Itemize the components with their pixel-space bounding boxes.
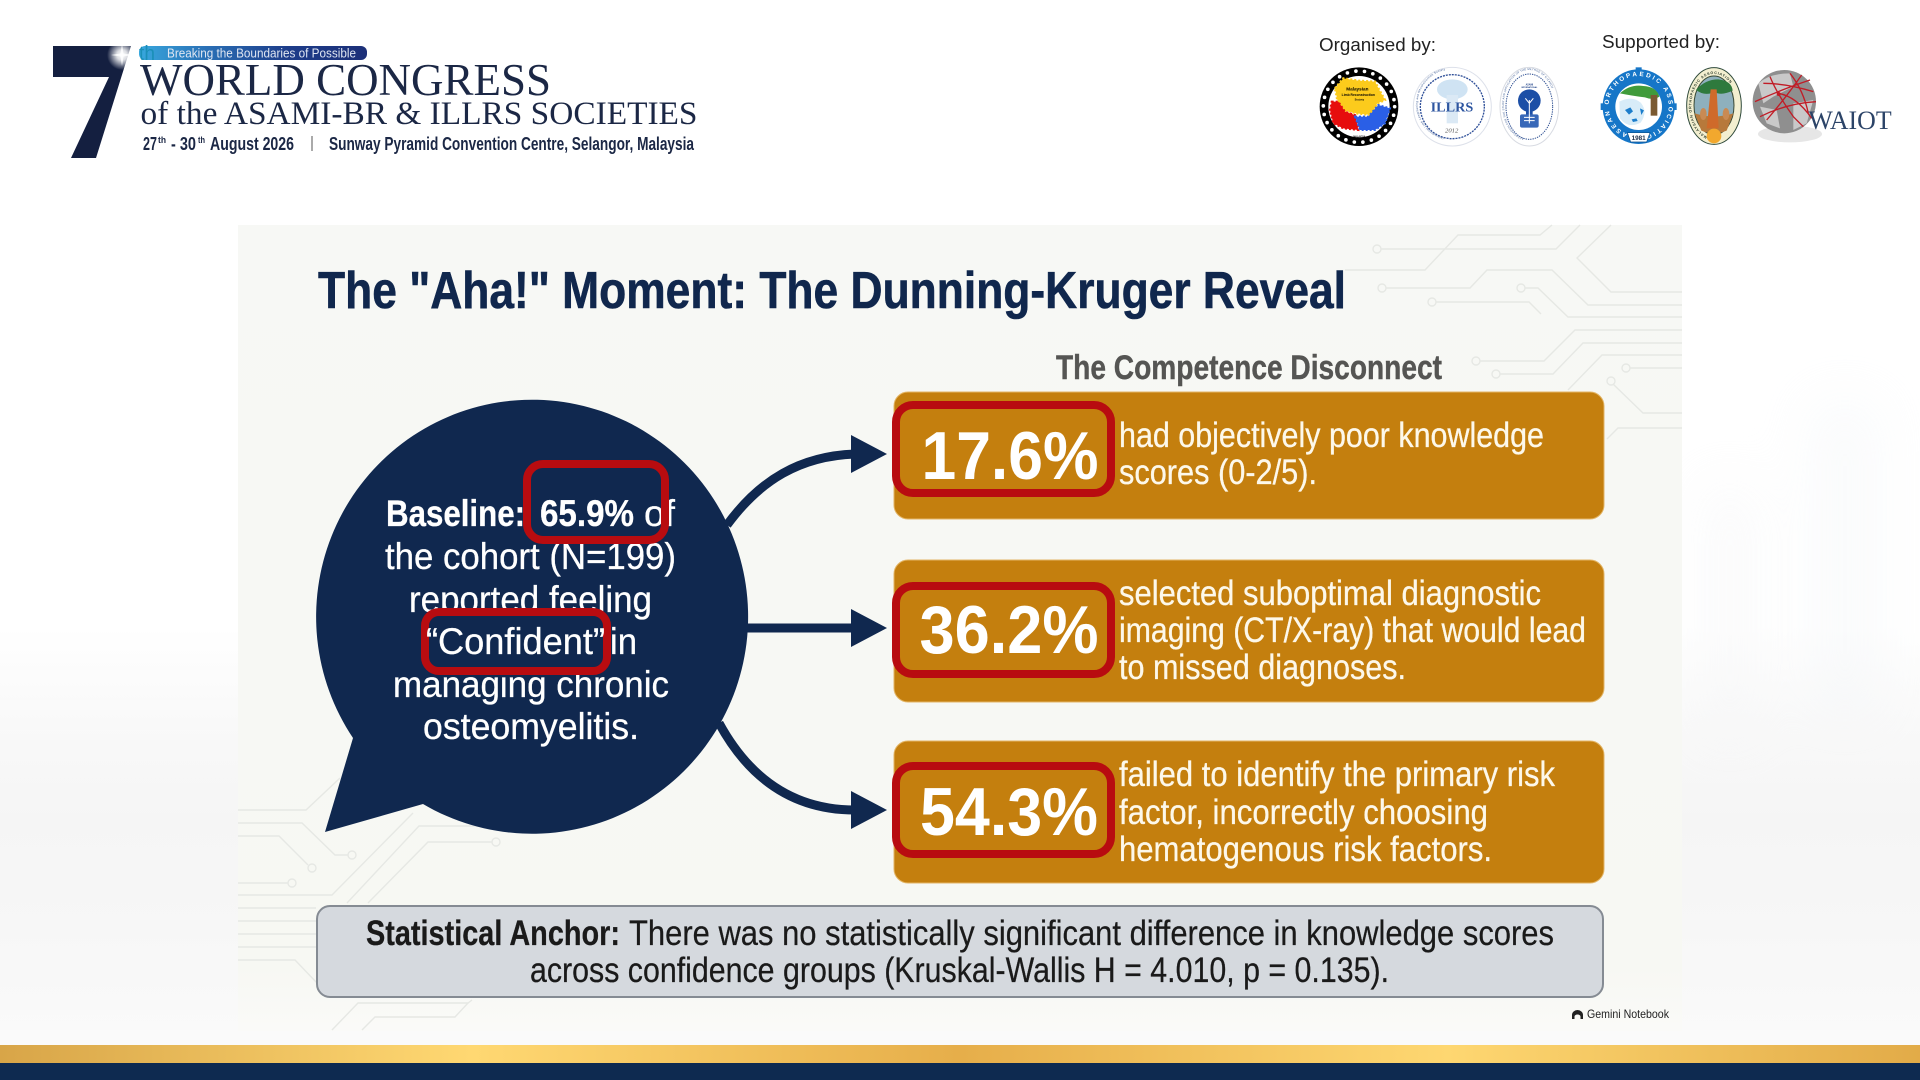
stat card: 54.3%: failed to identify the primary risk <box>1119 755 1555 794</box>
logo: Malaysian Orthopaedic Association <box>1686 67 1742 145</box>
logo: ILLRS: 2012 <box>1445 128 1459 135</box>
logo: ASEAN Orthopaedic Association: ASEAN ORTHOPAEDIC ASSOCIATION <box>1604 72 1673 139</box>
logo: ASAMI International: ASSOCIATION FOR THE STUDY AND APPLICATION OF THE METHOD OF ILIZAROV <box>1502 68 1554 140</box>
speech bubble: baseline confidence: the cohort (N=199) <box>385 536 676 577</box>
subheading: the competence disconnect: The Competence Disconnect <box>1056 349 1442 387</box>
callout: statistical anchor <box>317 906 1603 997</box>
arrow: to 36.2% <box>746 609 887 647</box>
supporter logos <box>1600 67 1892 145</box>
date and venue: 27 <box>143 134 157 154</box>
arrow: to 54.3% <box>719 723 887 829</box>
tagline pill: Breaking the Boundaries of Possible <box>167 46 356 60</box>
callout: statistical anchor: across confidence groups (Kruskal-Wallis H = 4.010, p = 0.135). <box>530 951 1389 990</box>
congress title <box>140 55 698 132</box>
logo: Malaysian Limb Reconstruction Society <box>1320 67 1398 146</box>
callout: statistical anchor: Statistical Anchor: <box>366 914 620 953</box>
stat card: 36.2%: 36.2% <box>920 592 1098 668</box>
highlight: Confident <box>425 612 607 671</box>
logo: Malaysian Limb Reconstruction Society: Malaysian <box>1346 87 1369 92</box>
congress title: WORLD CONGRESS <box>140 55 551 105</box>
callout: statistical anchor: There was no statistically significant difference in knowledge scores <box>629 914 1554 953</box>
stat card: 17.6% <box>894 392 1604 519</box>
logo: Malaysian Limb Reconstruction Society: MALAYSIA <box>1353 135 1366 138</box>
date and venue: th <box>158 135 166 145</box>
logo: WAIOT globe <box>1753 70 1892 142</box>
speech bubble: baseline confidence: reported feeling <box>409 579 652 620</box>
stat card: 36.2%: imaging (CT/X-ray) that would lead <box>1119 611 1586 650</box>
logo: ASAMI International: INTERNATIONAL <box>1521 86 1538 89</box>
organiser logos <box>1320 66 1560 146</box>
tagline pill <box>139 43 367 65</box>
stat card: 36.2% <box>894 560 1604 702</box>
stat card: 54.3%: hematogenous risk factors. <box>1119 830 1492 869</box>
date and venue <box>143 134 695 154</box>
stat card: 54.3%: factor, incorrectly choosing <box>1119 793 1488 832</box>
supported by label: Supported by: <box>1602 32 1720 52</box>
logo: ILLRS: ILLRS <box>1431 100 1474 115</box>
highlight: 65.9% <box>527 464 665 540</box>
slide title: The "Aha!" Moment: The Dunning-Kruger Reveal <box>318 262 1346 320</box>
panel: slide <box>238 225 1682 1031</box>
date and venue: August 2026 <box>210 134 294 154</box>
stat card: 36.2%: selected suboptimal diagnostic <box>1119 574 1541 613</box>
stat card: 36.2%: to missed diagnoses. <box>1119 648 1406 687</box>
arrow: to 17.6% <box>727 435 887 525</box>
tagline pill: th <box>139 43 155 65</box>
speech bubble: baseline confidence: Baseline: <box>386 493 525 534</box>
circuit background pattern <box>238 225 1682 1030</box>
date and venue: th <box>198 135 205 145</box>
date and venue: - 30 <box>171 134 196 154</box>
logo: ASAMI International: ASAMI <box>1526 83 1533 86</box>
logo numeral 7 <box>53 40 137 158</box>
speech bubble: baseline confidence: 65.9% <box>540 493 634 534</box>
speech bubble: baseline confidence: osteomyelitis. <box>423 706 639 747</box>
logo: ILLRS <box>1412 67 1492 146</box>
header: congress logo <box>53 40 698 158</box>
stat card: 54.3%: 54.3% <box>920 774 1098 850</box>
stat card: 17.6%: scores (0-2/5). <box>1119 453 1317 492</box>
stat card: 17.6%: had objectively poor knowledge <box>1119 416 1544 455</box>
logo: Malaysian Limb Reconstruction Society: Society <box>1355 98 1365 102</box>
date and venue: Sunway Pyramid Convention Centre, Selangor, Malaysia <box>329 134 695 154</box>
speech bubble: baseline confidence: managing chronic <box>393 664 669 705</box>
logo: ASEAN Orthopaedic Association: 1981 <box>1632 135 1646 142</box>
organised by label: Organised by: <box>1319 35 1436 55</box>
stat card: 54.3% <box>894 741 1604 883</box>
speech bubble: baseline confidence: in <box>610 621 637 662</box>
congress title: of the ASAMI-BR & ILLRS SOCIETIES <box>140 96 698 132</box>
speech bubble: baseline confidence <box>316 400 748 834</box>
logo: WAIOT globe: WAIOT <box>1808 106 1892 135</box>
stat card: 17.6%: 17.6% <box>922 418 1098 494</box>
speech bubble: baseline confidence: of <box>644 493 676 534</box>
logo: Malaysian Limb Reconstruction Society: Limb Reconstruction <box>1342 93 1375 97</box>
footer band <box>0 1045 1920 1080</box>
speech bubble: baseline confidence: “Confident” <box>426 621 605 662</box>
watermark: Gemini Notebook: Gemini Notebook <box>1587 1007 1670 1021</box>
logo: Malaysian Orthopaedic Association: MALAYSIAN ORTHOPAEDIC ASSOCIATION <box>1688 72 1732 139</box>
logo: ILLRS: International Limb Lengthening and Reconstruction Society <box>1416 68 1445 140</box>
